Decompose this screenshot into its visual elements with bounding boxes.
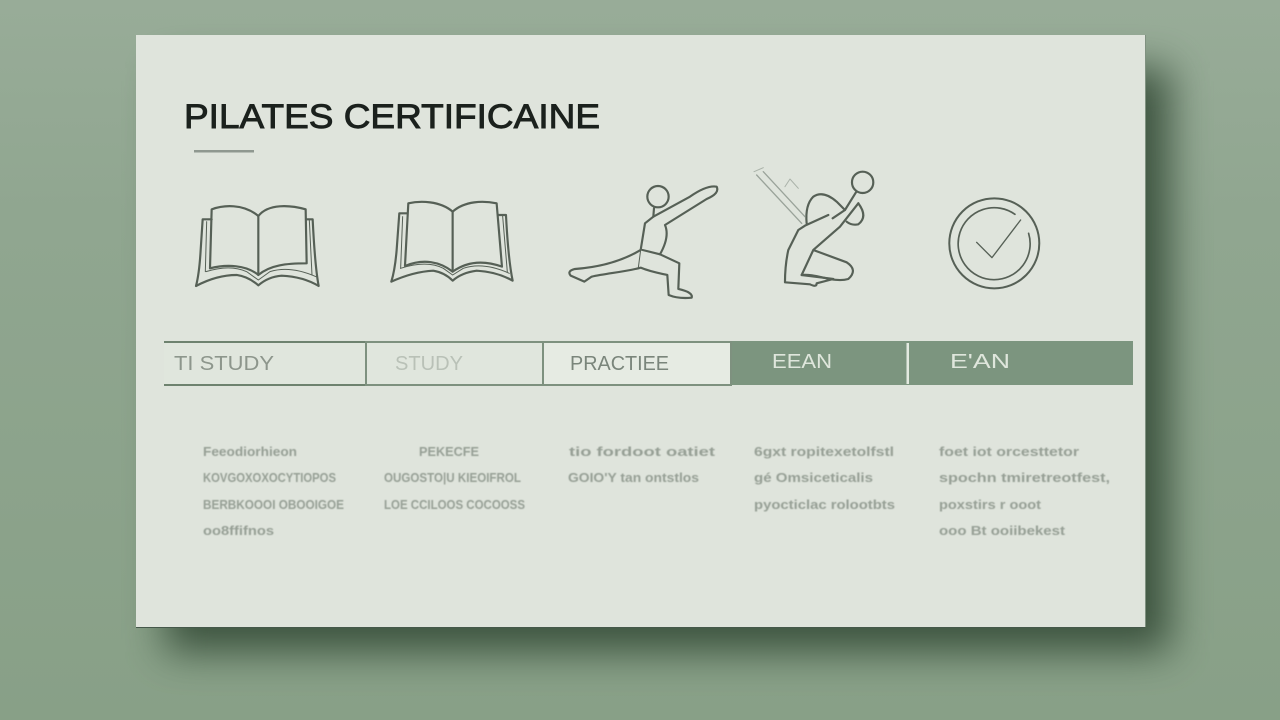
- text block: column 4: [754, 444, 895, 512]
- text block: column 2: OUGOSTO|U KIEOIFROL: [384, 470, 521, 485]
- panel: certificate card: [136, 35, 1145, 627]
- text block: column 2: PEKECFE: [419, 444, 479, 459]
- card shadow: [165, 68, 1170, 652]
- text block: column 1: BERBKOOOI OBOOIGOE: [203, 497, 344, 512]
- step 3: practice: [543, 342, 731, 385]
- text block: column 3: GOIO'Y tan ontstlos: [568, 470, 699, 485]
- step 4: exam: [732, 341, 908, 385]
- step 5: exam: [906, 341, 1133, 385]
- text block: column 5: foet iot orcesttetor: [939, 444, 1079, 459]
- text block: column 5: poxstirs r ooot: [939, 497, 1042, 512]
- icon: open book 2: [391, 202, 513, 282]
- step 5: exam: E'AN: [950, 351, 1010, 373]
- title underline: [194, 150, 254, 152]
- text block: column 1: oo8ffifnos: [203, 523, 274, 538]
- text block: column 4: 6gxt ropitexetolfstl: [754, 444, 894, 459]
- text block: column 5: [939, 444, 1110, 538]
- icon: lunge figure: [569, 186, 717, 298]
- icon: check circle: [949, 198, 1039, 288]
- icon: kneeling stretch figure: [754, 168, 873, 286]
- text block: column 5: spochn tmiretreotfest,: [939, 470, 1110, 485]
- title: PILATES CERTIFICAINE: [184, 98, 600, 136]
- step 2: study: [366, 342, 543, 385]
- text block: column 2: LOE CCILOOS COCOOSS: [384, 497, 525, 512]
- text block: column 3: [568, 444, 716, 485]
- text block: column 1: KOVGOXOXOCYTIOPOS: [203, 470, 336, 485]
- step 3: practice: PRACTIEE: [570, 353, 669, 375]
- text block: column 4: gé Omsiceticalis: [754, 470, 873, 485]
- step bar: [164, 341, 1133, 385]
- text block: column 5: ooo Bt ooiibekest: [939, 523, 1066, 538]
- step 1: study: [164, 342, 366, 385]
- text block: column 2: [384, 444, 525, 512]
- step 1: study: TI STUDY: [174, 353, 274, 375]
- text block: column 4: pyocticlac rolootbts: [754, 497, 895, 512]
- step 2: study: STUDY: [395, 353, 463, 375]
- text block: column 3: tio fordoot oatiet: [569, 444, 716, 459]
- text block: column 1: [203, 444, 344, 538]
- step 4: exam: EEAN: [772, 351, 832, 373]
- icon: open book 1: [196, 206, 319, 286]
- text block: column 1: Feeodiorhieon: [203, 444, 297, 459]
